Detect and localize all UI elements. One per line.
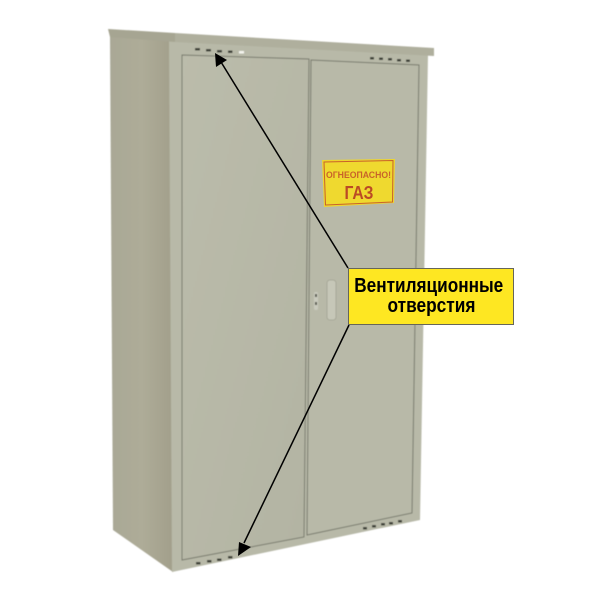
door handle bbox=[314, 280, 336, 320]
cabinet front frame bbox=[169, 40, 428, 572]
cabinet roof bbox=[175, 33, 434, 56]
arrow: to bottom vents bbox=[238, 325, 349, 556]
callout text: отверстия bbox=[388, 295, 476, 317]
arrow: to top vents bbox=[215, 53, 348, 268]
warning sign bbox=[322, 159, 395, 207]
left door bbox=[182, 55, 309, 560]
cabinet side panel bbox=[110, 36, 173, 572]
top left vents bbox=[195, 48, 244, 54]
callout bbox=[348, 268, 514, 324]
bottom right vents bbox=[363, 520, 402, 530]
gas cabinet bbox=[108, 29, 434, 572]
right door bbox=[307, 60, 419, 535]
callout text: Вентиляционные bbox=[354, 275, 503, 297]
sign line 1: ОГНЕОПАСНО! bbox=[326, 170, 391, 181]
top right vents bbox=[370, 57, 410, 62]
bottom left vents bbox=[196, 556, 232, 564]
sign line 2: ГАЗ bbox=[344, 183, 374, 203]
